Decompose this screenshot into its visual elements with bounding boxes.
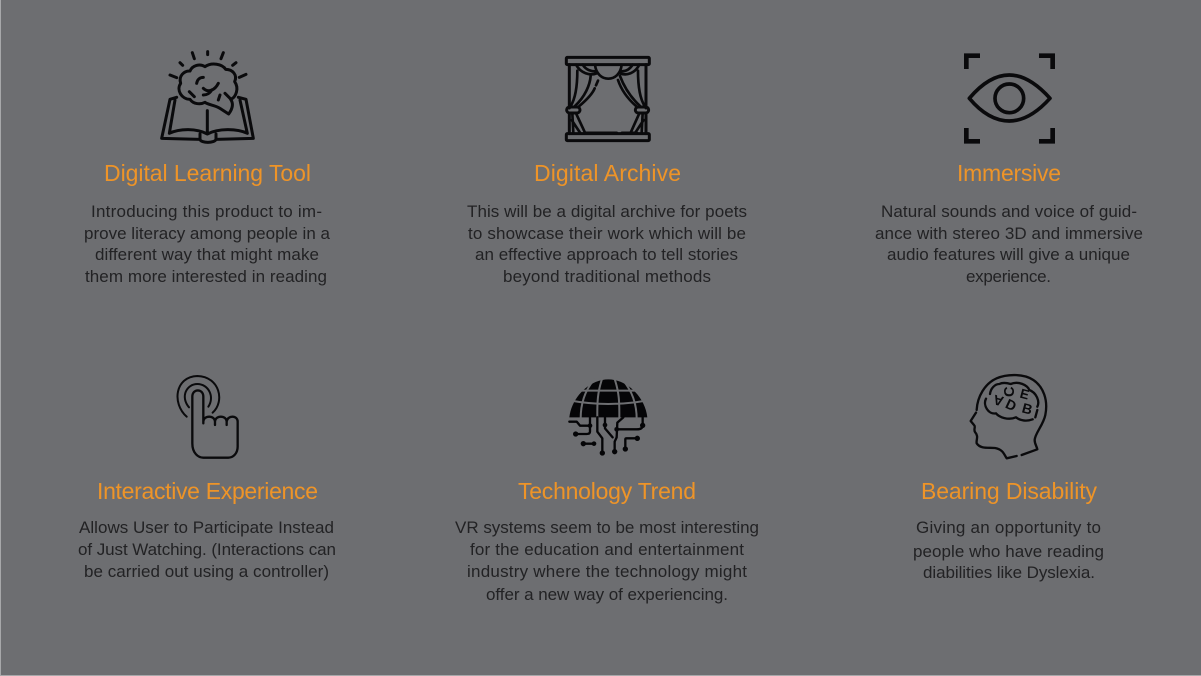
icon: head with letters in brain: E: [1018, 386, 1031, 403]
icon: pointing hand with touch rings: [178, 376, 238, 458]
text block: VR systems seem to be most interesting: [455, 518, 759, 537]
text block: Natural sounds and voice of guid-: [881, 202, 1137, 221]
text block: [84, 202, 331, 286]
heading: Interactive Experience: [97, 478, 318, 504]
text block: be carried out using a controller): [84, 562, 329, 581]
icon: head with letters in brain: C: [1002, 386, 1018, 397]
text block: [467, 202, 747, 286]
panel: Digital Learning Tool: [84, 52, 331, 286]
panel: Bearing Disability: [913, 375, 1104, 582]
text block: different way that might make: [95, 245, 319, 264]
text block: beyond traditional methods: [503, 267, 711, 286]
heading: Immersive: [957, 160, 1061, 186]
text block: offer a new way of experiencing.: [486, 585, 728, 604]
text block: experience.: [966, 267, 1051, 286]
panel: Technology Trend: [455, 377, 759, 604]
text block: industry where the technology might: [467, 562, 747, 581]
text block: ance with stereo 3D and immersive: [875, 224, 1143, 243]
text block: [78, 518, 336, 581]
text block: them more interested in reading: [85, 267, 327, 286]
text block: of Just Watching. (Interactions can: [78, 540, 336, 559]
text block: [455, 518, 759, 604]
text block: [913, 518, 1104, 582]
text block: for the education and entertainment: [470, 540, 744, 559]
text block: Introducing this product to im-: [91, 202, 322, 221]
panel: Digital Archive: [467, 57, 747, 286]
icon: head with letters in brain: [971, 375, 1046, 458]
text block: [875, 202, 1143, 286]
text block: Allows User to Participate Instead: [79, 518, 334, 537]
panel: Interactive Experience: [78, 376, 336, 581]
text block: Giving an opportunity to: [916, 518, 1101, 537]
heading: Bearing Disability: [921, 478, 1098, 504]
icon: head with letters in brain: D: [1003, 396, 1019, 414]
icon: brain over open book: [162, 52, 253, 142]
text block: to showcase their work which will be: [468, 224, 746, 243]
panel: Immersive: [875, 56, 1143, 286]
heading: Digital Learning Tool: [104, 160, 311, 186]
text block: people who have reading: [913, 542, 1104, 561]
icon: eye in viewfinder: [966, 56, 1053, 141]
heading: Technology Trend: [518, 478, 696, 504]
text block: audio features will give a unique: [887, 245, 1130, 264]
heading: Digital Archive: [534, 160, 681, 186]
text block: prove literacy among people in a: [84, 224, 331, 243]
text block: This will be a digital archive for poets: [467, 202, 747, 221]
icon: head with letters in brain: A: [991, 392, 1005, 410]
text block: an effective approach to tell stories: [475, 245, 738, 264]
icon: head with letters in brain: B: [1020, 400, 1034, 418]
icon: stage curtain: [566, 57, 649, 141]
text block: diabilities like Dyslexia.: [923, 563, 1095, 582]
icon: globe with circuit lines: [569, 377, 647, 456]
